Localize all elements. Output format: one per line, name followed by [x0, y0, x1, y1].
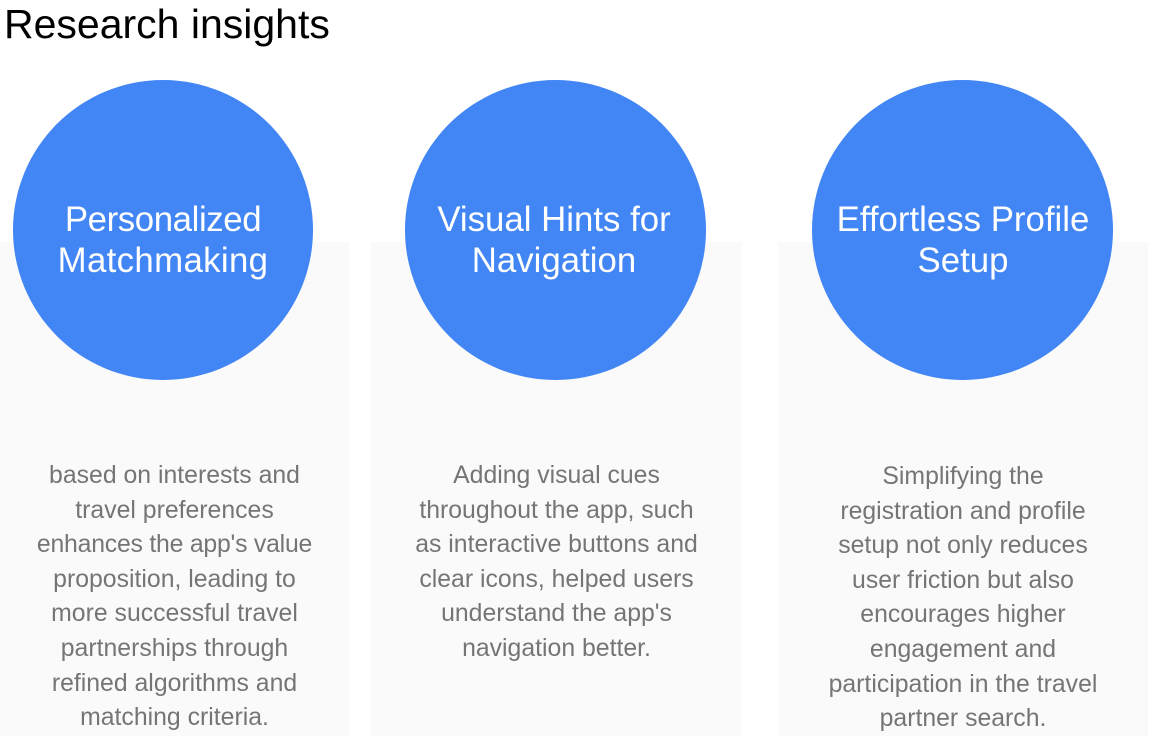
- heading: effortless profile setup: [837, 200, 1089, 280]
- text: effortless profile setup description: engagement and: [870, 636, 1056, 663]
- heading: visual hints: [437, 200, 671, 280]
- heading: personalized matchmaking: Personalized: [65, 200, 261, 239]
- text: effortless profile setup description: [829, 463, 1097, 732]
- text: visual hints description: as interactive buttons and: [415, 531, 698, 558]
- text: personalized matchmaking description: based on interests and: [49, 462, 300, 489]
- text: visual hints description: understand the app's: [441, 600, 672, 627]
- text: personalized matchmaking description: matching criteria.: [80, 704, 269, 731]
- text: visual hints description: [415, 462, 698, 662]
- heading: visual hints: Navigation: [472, 241, 636, 280]
- circle: effortless profile setup: [812, 80, 1113, 380]
- circle: visual hints: [405, 80, 706, 380]
- panel: personalized matchmaking: [0, 242, 349, 736]
- text: effortless profile setup description: encourages higher: [860, 601, 1066, 628]
- text: personalized matchmaking description: partnerships through: [61, 635, 288, 662]
- text: personalized matchmaking description: travel preferences: [75, 497, 274, 524]
- heading: personalized matchmaking: Matchmaking: [58, 241, 268, 280]
- text: effortless profile setup description: partner search.: [880, 705, 1046, 732]
- text: personalized matchmaking description: more successful travel: [51, 600, 298, 627]
- circle: personalized matchmaking: [13, 80, 313, 380]
- text: personalized matchmaking description: proposition, leading to: [53, 566, 296, 593]
- panel: effortless profile setup: [778, 242, 1148, 736]
- text: visual hints description: clear icons, helped users: [419, 566, 694, 593]
- text: effortless profile setup description: user friction but also: [852, 567, 1074, 594]
- panel: visual hints: [371, 242, 742, 736]
- text: effortless profile setup description: registration and profile: [840, 498, 1086, 525]
- text: personalized matchmaking description: refined algorithms and: [52, 670, 297, 697]
- text: visual hints description: Adding visual cues: [453, 462, 660, 489]
- text: effortless profile setup description: setup not only reduces: [838, 532, 1088, 559]
- text: personalized matchmaking description: [37, 462, 312, 731]
- title: Research insights: [4, 1, 330, 47]
- text: effortless profile setup description: Simplifying the: [882, 463, 1044, 490]
- text: visual hints description: navigation better.: [462, 635, 651, 662]
- heading: effortless profile setup: Setup: [918, 241, 1008, 280]
- heading: visual hints: Visual Hints for: [437, 200, 671, 239]
- text: effortless profile setup description: participation in the travel: [829, 671, 1097, 698]
- text: visual hints description: throughout the app, such: [419, 497, 694, 524]
- text: personalized matchmaking description: enhances the app's value: [37, 531, 312, 558]
- heading: personalized matchmaking: [58, 200, 268, 280]
- heading: effortless profile setup: Effortless Profile: [837, 200, 1089, 239]
